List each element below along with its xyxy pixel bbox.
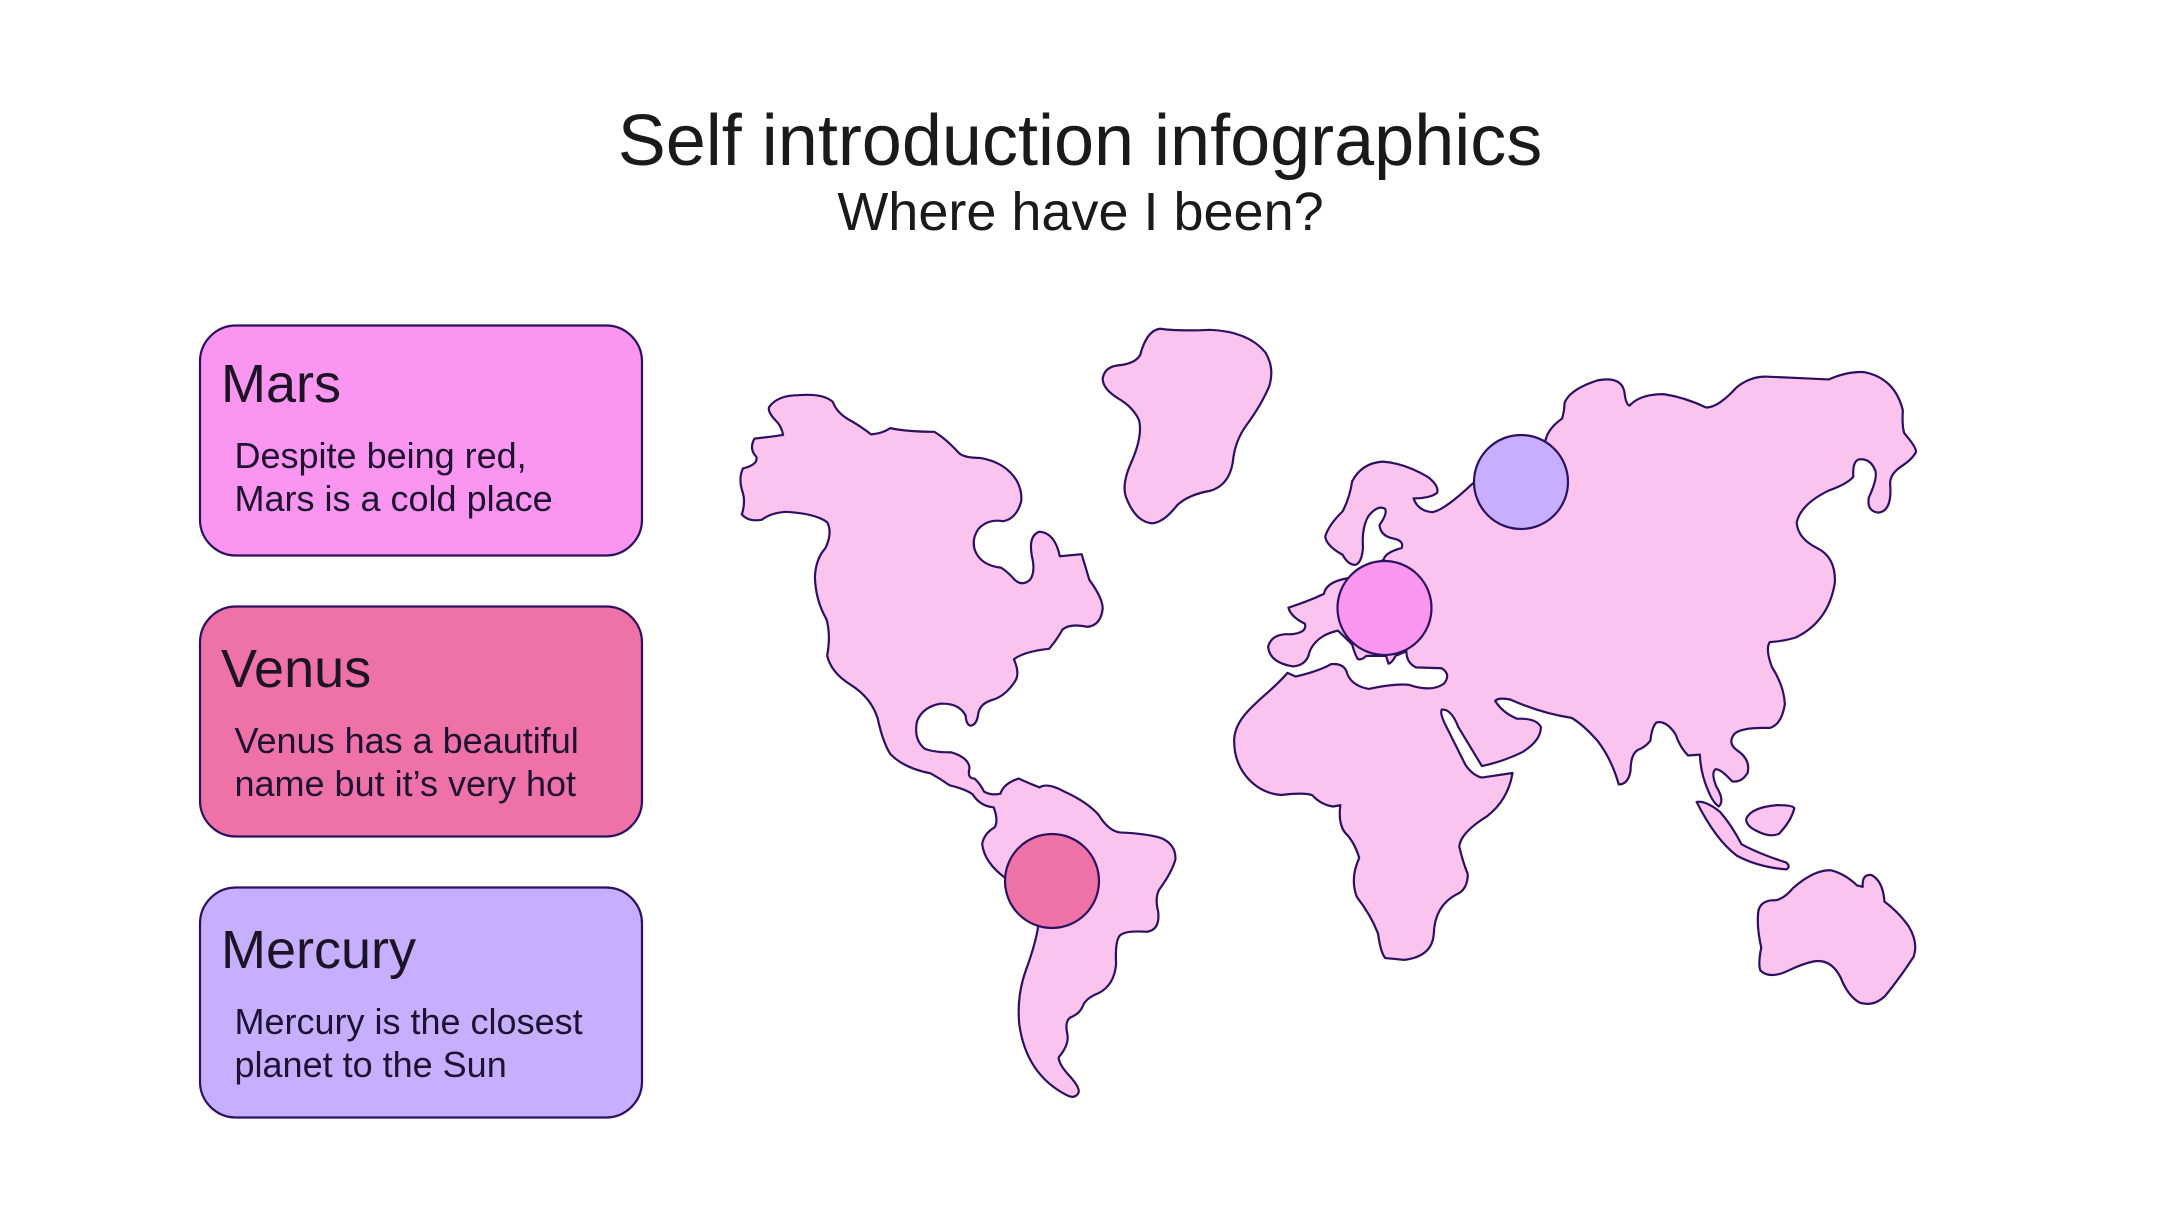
Mars heading: Mars: [221, 354, 341, 414]
world map: [740, 329, 1916, 1097]
Venus description: Venus has a beautiful: [234, 720, 579, 761]
map: Americas: [740, 395, 1175, 1097]
panel: Venus: [200, 606, 642, 836]
subtitle: Where have I been?: [837, 182, 1324, 242]
map: Eurasia and Africa: [1234, 372, 1916, 960]
panel: Mercury: [200, 888, 642, 1118]
panel: Mars: [200, 326, 642, 556]
Mars description: Despite being red,: [234, 435, 527, 476]
title: Self introduction infographics: [618, 101, 1542, 181]
map marker: Mars, Europe: [1338, 561, 1432, 655]
Mercury description: planet to the Sun: [234, 1044, 507, 1085]
map marker: Venus, South America: [1005, 834, 1099, 928]
Mars description: Mars is a cold place: [234, 478, 553, 519]
map: Sumatra and Java: [1697, 802, 1789, 869]
Venus card background: [200, 606, 642, 836]
Mercury heading: Mercury: [221, 920, 416, 980]
Venus heading: Venus: [221, 639, 371, 699]
map marker: Mercury, Russia: [1474, 435, 1568, 529]
Mercury description: Mercury is the closest: [234, 1001, 583, 1042]
Mars card background: [200, 326, 642, 556]
Venus description: name but it’s very hot: [234, 763, 576, 804]
map: Greenland: [1103, 329, 1271, 523]
Mercury card background: [200, 888, 642, 1118]
map: Borneo: [1746, 805, 1794, 835]
map: Australia: [1758, 870, 1915, 1004]
